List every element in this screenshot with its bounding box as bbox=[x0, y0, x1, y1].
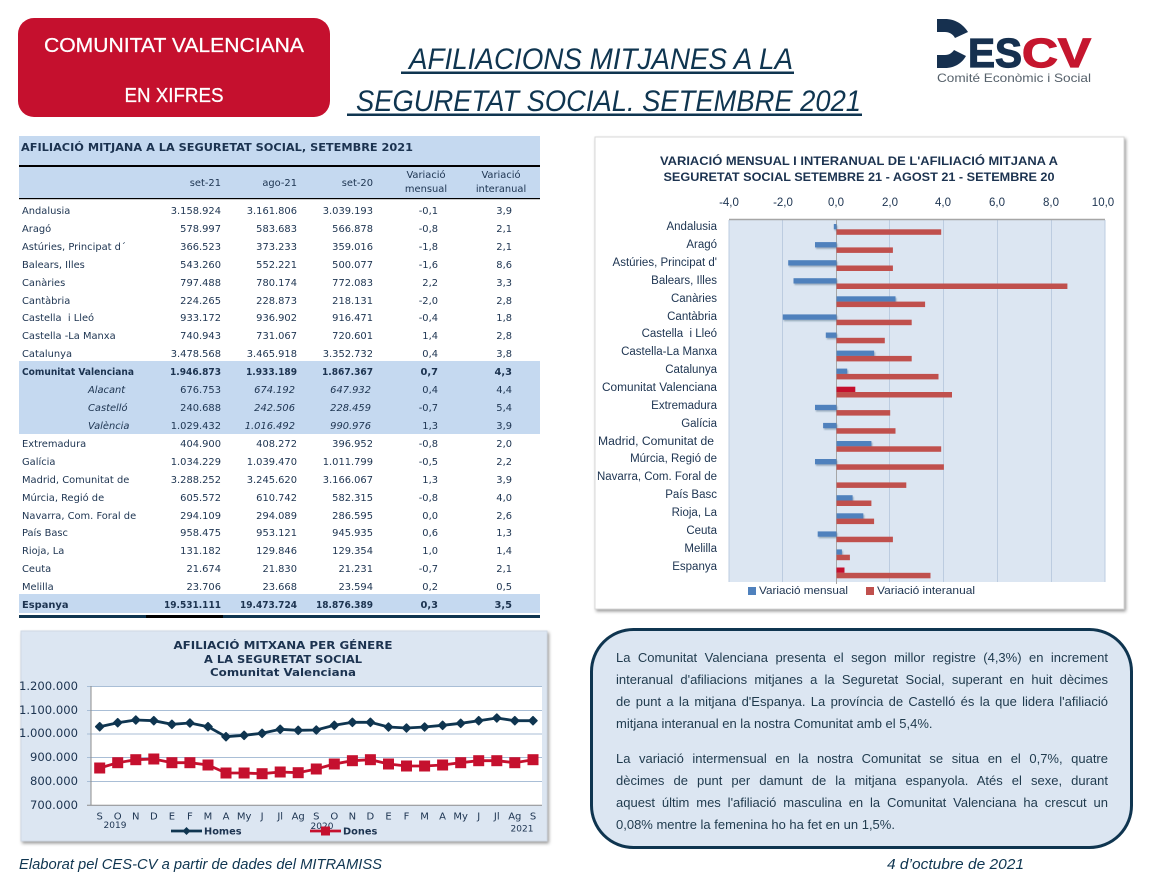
x axis labels: Jl bbox=[493, 812, 500, 822]
category labels: Cantàbria bbox=[667, 311, 718, 323]
row: Aragó: 583.683 bbox=[256, 224, 297, 235]
category labels: Espanya bbox=[672, 561, 718, 573]
plot background bbox=[91, 686, 542, 805]
row: Aragó: 578.997 bbox=[180, 224, 221, 235]
table header bbox=[19, 167, 540, 199]
row: Castella i Lleó bbox=[22, 312, 512, 324]
row: Castella i Lleó: 933.172 bbox=[180, 313, 221, 324]
row: País Basc bbox=[22, 527, 512, 539]
row: València: 990.976 bbox=[330, 421, 371, 432]
category labels: Galícia bbox=[681, 418, 718, 430]
x axis labels: Ag bbox=[292, 812, 305, 822]
row: Extremadura: -0,8 bbox=[419, 439, 438, 450]
grid lines and axis bbox=[729, 220, 1105, 584]
x axis labels: D bbox=[150, 812, 158, 822]
row: Rioja: 129.354 bbox=[332, 546, 373, 557]
row: Madrid: 3.288.252 bbox=[171, 475, 221, 486]
row: Comunitat Valenciana bbox=[22, 367, 512, 378]
row: Catalunya: Catalunya bbox=[22, 349, 72, 360]
row: Andalusia: 3.161.806 bbox=[247, 206, 297, 217]
row: Navarra: 294.109 bbox=[180, 511, 221, 522]
panel: text box background bbox=[592, 630, 1132, 848]
category labels: Aragó bbox=[686, 239, 717, 251]
row: Canàries: 797.488 bbox=[180, 278, 221, 289]
x axis labels bbox=[97, 812, 536, 834]
row: Madrid: 3.166.067 bbox=[323, 475, 373, 486]
x axis labels: A bbox=[223, 812, 230, 822]
x axis labels: Jl bbox=[276, 812, 283, 822]
table title band: AFILIACIÓ MITJANA A LA SEGURETAT SOCIAL, SETEMBRE 2021 bbox=[21, 141, 413, 154]
row: Rioja: 131.182 bbox=[180, 546, 221, 557]
x axis labels: N bbox=[132, 812, 140, 822]
text block: paragraph 2: 0,08% mentre la femenina ho ha fet en un 1,5%. bbox=[616, 817, 895, 832]
category labels: Melilla bbox=[684, 543, 718, 555]
row: Ceuta: Ceuta bbox=[22, 564, 51, 575]
row: Extremadura: Extremadura bbox=[22, 439, 86, 450]
row: Cantàbria: 2,8 bbox=[496, 296, 512, 307]
text block: paragraph 1 bbox=[616, 650, 1108, 731]
bars: variació mensual bbox=[783, 224, 896, 555]
row: Castelló: 242.506 bbox=[254, 403, 295, 414]
table header: interanual bbox=[476, 184, 526, 195]
row: Cantàbria: 218.131 bbox=[332, 296, 373, 307]
row: Navarra: 0,0 bbox=[422, 511, 438, 522]
category labels: Madrid, Comunitat de bbox=[598, 436, 714, 448]
row: Comunitat Valenciana: 1.946.873 bbox=[170, 367, 221, 378]
row: Balears: Balears, Illes bbox=[22, 260, 85, 271]
row: Rioja: Rioja, La bbox=[22, 546, 64, 557]
x axis labels: 2019 bbox=[104, 821, 127, 831]
row: Aragó: Aragó bbox=[22, 223, 51, 235]
row: Cantàbria: Cantàbria bbox=[22, 295, 70, 307]
row: Múrcia: 610.742 bbox=[256, 493, 297, 504]
row: València: 1.016.492 bbox=[245, 421, 295, 432]
row: Cantàbria: -2,0 bbox=[419, 296, 438, 307]
row: Castella i Lleó: 916.471 bbox=[332, 313, 373, 324]
row: Cantàbria: 228.873 bbox=[256, 296, 297, 307]
row: Castella i Lleó: Castella i Lleó bbox=[22, 312, 94, 324]
row: Comunitat Valenciana: 1.933.189 bbox=[246, 367, 297, 378]
x axis labels: O bbox=[114, 812, 122, 822]
row: Navarra: 2,6 bbox=[496, 511, 512, 522]
row: Catalunya: 3,8 bbox=[496, 349, 512, 360]
text block: paragraph 1: de punt a la mitjana d'Espanya. La província de Castelló és la que lidera l'afiliació bbox=[616, 694, 1108, 709]
row: Ceuta: 21.830 bbox=[262, 564, 297, 575]
category labels: Catalunya bbox=[665, 364, 718, 376]
y axis labels: 1.200.000 bbox=[19, 679, 78, 693]
row: Melilla: 23.706 bbox=[186, 582, 221, 593]
row: Comunitat Valenciana: 1.867.367 bbox=[322, 367, 373, 378]
x axis labels: F bbox=[404, 812, 410, 822]
row: Melilla: 0,5 bbox=[496, 582, 512, 593]
row: Balears: 552.221 bbox=[256, 260, 297, 271]
row: Espanya bbox=[22, 600, 512, 611]
row: País Basc: 953.121 bbox=[256, 528, 297, 539]
category labels: Extremadura bbox=[651, 400, 718, 412]
row: Madrid bbox=[22, 475, 512, 486]
row: País Basc: 945.935 bbox=[332, 528, 373, 539]
table title band bbox=[19, 136, 540, 167]
x axis labels: J bbox=[260, 812, 264, 822]
row: Ceuta: -0,7 bbox=[419, 564, 438, 575]
x axis labels: My bbox=[453, 812, 468, 822]
text block: paragraph 1: La Comunitat Valenciana presenta el segon millor registre (4,3%) en increment bbox=[616, 650, 1108, 665]
row: Navarra bbox=[22, 511, 512, 522]
row: Alacant: 674.192 bbox=[254, 385, 295, 396]
x axis labels: E bbox=[385, 812, 392, 822]
badge: Comunitat Valenciana en xifres bbox=[18, 18, 330, 117]
category labels: Navarra, Com. Foral de bbox=[597, 471, 717, 483]
row: Espanya: 18.876.389 bbox=[316, 600, 373, 611]
row: Espanya: 19.473.724 bbox=[240, 600, 297, 611]
title: SEGURETAT SOCIAL. SETEMBRE 2021 bbox=[356, 85, 861, 118]
row: Canàries: 780.174 bbox=[256, 278, 297, 289]
row: Múrcia: 605.572 bbox=[180, 493, 221, 504]
row: Balears: 543.260 bbox=[180, 260, 221, 271]
table header: ago-21 bbox=[262, 178, 297, 189]
row: Castella-La Manxa: 2,8 bbox=[496, 331, 512, 342]
row: Rioja: 1,4 bbox=[496, 546, 512, 557]
badge: Comunitat Valenciana en xifres: EN XIFRES bbox=[124, 85, 224, 107]
plot area bbox=[729, 220, 1105, 582]
line chart title: AFILIACIÓ MITXANA PER GÉNERE bbox=[174, 639, 392, 652]
row: Aragó: 566.878 bbox=[332, 224, 373, 235]
row: Rioja bbox=[22, 546, 512, 557]
category labels: Castella i Lleó bbox=[642, 328, 717, 340]
row: Melilla: 0,2 bbox=[422, 582, 438, 593]
row: Catalunya: 0,4 bbox=[422, 349, 438, 360]
row: Extremadura: 408.272 bbox=[256, 439, 297, 450]
title bbox=[347, 43, 862, 118]
row: Espanya: 0,3 bbox=[420, 600, 438, 611]
y axis labels: 700.000 bbox=[30, 798, 78, 812]
row: Navarra: Navarra, Com. Foral de bbox=[22, 511, 136, 522]
category labels: Comunitat Valenciana bbox=[602, 382, 718, 394]
y axis labels: 1.000.000 bbox=[19, 726, 78, 740]
row: Múrcia: 582.315 bbox=[332, 493, 373, 504]
chart legend: Variació mensual bbox=[759, 585, 848, 597]
row: Melilla bbox=[22, 582, 512, 593]
row: Catalunya bbox=[22, 349, 512, 360]
row: València: 3,9 bbox=[496, 421, 512, 432]
row: Castelló: Castelló bbox=[88, 402, 128, 414]
logo: CES-CV: Comité Econòmic i Social bbox=[937, 71, 1091, 85]
panel: line chart afiliació per gènere bbox=[19, 631, 547, 841]
category labels: Balears, Illes bbox=[651, 275, 717, 287]
category labels: Andalusia bbox=[666, 221, 718, 233]
row: Catalunya: 3.478.568 bbox=[171, 349, 221, 360]
y axis labels: 1.100.000 bbox=[19, 703, 78, 717]
row: Canàries: Canàries bbox=[22, 277, 65, 289]
highlight band: Espanya bbox=[19, 594, 540, 613]
line chart title: A LA SEGURETAT SOCIAL bbox=[204, 654, 362, 666]
row: Galícia: -0,5 bbox=[419, 457, 438, 468]
x axis labels: O bbox=[330, 812, 338, 822]
logo: CES-CV: CV bbox=[1022, 30, 1092, 76]
bars: highlighted mensual, Comunitat Valenciana and Espanya bbox=[836, 387, 855, 573]
x axis labels: 2,0 bbox=[882, 197, 898, 209]
row: Extremadura: 396.952 bbox=[332, 439, 373, 450]
x axis labels: 4,0 bbox=[935, 197, 951, 209]
row: Navarra: 294.089 bbox=[256, 511, 297, 522]
row: Castella-La Manxa: 720.601 bbox=[332, 331, 373, 342]
table header: set-20 bbox=[342, 178, 373, 189]
line chart legend: Dones bbox=[343, 826, 377, 838]
row: Astúries: 359.016 bbox=[332, 242, 373, 253]
table header: Variació bbox=[406, 169, 446, 181]
row: Balears: 8,6 bbox=[496, 260, 512, 271]
logo: CES-CV bbox=[937, 19, 1092, 85]
row: Castelló: 5,4 bbox=[496, 403, 512, 414]
row: País Basc: País Basc bbox=[22, 527, 68, 539]
row: País Basc: 958.475 bbox=[180, 528, 221, 539]
chart title bbox=[660, 153, 1058, 184]
chart title: VARIACIÓ MENSUAL I INTERANUAL DE L'AFILIACIÓ MITJANA A bbox=[660, 153, 1058, 168]
category labels: Múrcia, Regió de bbox=[630, 453, 717, 465]
x axis labels: F bbox=[187, 812, 193, 822]
row: Andalusia: 3.158.924 bbox=[171, 206, 221, 217]
x axis labels: My bbox=[237, 812, 251, 822]
row: Madrid: 3.245.620 bbox=[247, 475, 297, 486]
x axis labels: 8,0 bbox=[1043, 197, 1059, 209]
row: Castella-La Manxa: 740.943 bbox=[180, 331, 221, 342]
row: Astúries: -1,8 bbox=[419, 242, 438, 253]
y axis labels: 800.000 bbox=[30, 774, 78, 788]
row: Balears bbox=[22, 260, 512, 271]
horizontal grid bbox=[87, 686, 542, 782]
category labels: Ceuta bbox=[686, 525, 718, 537]
chart legend bbox=[748, 585, 975, 597]
x axis labels bbox=[719, 197, 1114, 209]
row: Andalusia: Andalusia bbox=[22, 206, 70, 217]
x axis labels: D bbox=[367, 812, 375, 822]
row: València: València bbox=[88, 420, 129, 432]
x axis labels: S bbox=[530, 812, 536, 822]
row: Aragó bbox=[22, 223, 512, 235]
row: Astúries: 373.233 bbox=[256, 242, 297, 253]
row: Castella i Lleó: 936.902 bbox=[256, 313, 297, 324]
chart legend: Variació interanual bbox=[877, 585, 975, 597]
table header: Variació bbox=[481, 169, 521, 181]
chart title: SEGURETAT SOCIAL SETEMBRE 21 - AGOST 21 - SETEMBRE 20 bbox=[664, 170, 1055, 184]
row: Espanya: Espanya bbox=[22, 600, 68, 611]
row: Castelló: -0,7 bbox=[419, 403, 438, 414]
row: Galícia bbox=[22, 456, 512, 468]
row: Galícia: 1.011.799 bbox=[323, 457, 373, 468]
row: Navarra: 286.595 bbox=[332, 511, 373, 522]
row: Alacant: Alacant bbox=[87, 385, 126, 396]
row: Astúries: 366.523 bbox=[180, 242, 221, 253]
category labels: País Basc bbox=[665, 489, 717, 501]
x axis labels: S bbox=[313, 812, 319, 822]
x axis labels: 6,0 bbox=[989, 197, 1005, 209]
highlight band: Comunitat Valenciana bbox=[19, 361, 540, 434]
row: Alacant: 0,4 bbox=[422, 385, 438, 396]
row: Alacant: 676.753 bbox=[180, 385, 221, 396]
category labels bbox=[597, 221, 718, 573]
row: Castella-La Manxa: 1,4 bbox=[422, 331, 438, 342]
row: Astúries: Astúries, Principat d´ bbox=[22, 241, 126, 253]
row: Melilla: Melilla bbox=[22, 582, 54, 593]
text block: paragraph 2: aquest últim mes l'afiliació masculina en la Comunitat Valenciana ha crescut un bbox=[616, 795, 1108, 810]
date: 4 d’octubre de 2021 bbox=[887, 857, 1024, 873]
badge: Comunitat Valenciana en xifres: COMUNITAT VALENCIANA bbox=[44, 35, 305, 57]
row: Múrcia: 4,0 bbox=[496, 493, 512, 504]
row: Canàries: 2,2 bbox=[422, 278, 438, 289]
text block: paragraph 2: dècimes de punt per damunt de la mitjana espanyola. Atés el sexe, durant bbox=[616, 773, 1108, 788]
x axis labels: 2020 bbox=[311, 822, 334, 832]
table header: mensual bbox=[405, 184, 447, 195]
row: Espanya: 3,5 bbox=[494, 600, 512, 611]
x axis labels: -4,0 bbox=[719, 197, 739, 209]
row: Múrcia: Múrcia, Regió de bbox=[22, 492, 104, 504]
line: Homes bbox=[96, 714, 537, 741]
row: Balears: -1,6 bbox=[419, 260, 438, 271]
text block: paragraph 2 bbox=[616, 751, 1108, 832]
row: Extremadura: 404.900 bbox=[180, 439, 221, 450]
x axis labels: 10,0 bbox=[1092, 197, 1114, 209]
row: Múrcia: -0,8 bbox=[419, 493, 438, 504]
row: Ceuta bbox=[22, 564, 512, 575]
row: Castelló bbox=[88, 402, 512, 414]
line chart title bbox=[174, 639, 392, 679]
row: Galícia: Galícia bbox=[22, 456, 55, 468]
row: València: 1.029.432 bbox=[171, 421, 221, 432]
row: Andalusia: 3,9 bbox=[496, 206, 512, 217]
row: Castelló: 240.688 bbox=[180, 403, 221, 414]
row: Astúries: 2,1 bbox=[496, 242, 512, 253]
row: Alacant: 4,4 bbox=[496, 385, 512, 396]
row: Andalusia bbox=[22, 206, 512, 217]
x axis labels: M bbox=[204, 812, 212, 822]
row: Castella i Lleó: -0,4 bbox=[419, 313, 438, 324]
row: Castella-La Manxa: 731.067 bbox=[256, 331, 297, 342]
x axis labels: Ag bbox=[508, 812, 521, 822]
row: Ceuta: 2,1 bbox=[496, 564, 512, 575]
row: Ceuta: 21.231 bbox=[338, 564, 373, 575]
row: València: 1,3 bbox=[422, 421, 438, 432]
row: València bbox=[88, 420, 512, 432]
row: Extremadura: 2,0 bbox=[496, 439, 512, 450]
text block: paragraph 2: La variació intermensual en la nostra Comunitat se situa en el 0,7%, quatre bbox=[616, 751, 1108, 766]
row: Cantàbria bbox=[22, 295, 512, 307]
row: Aragó: 2,1 bbox=[496, 224, 512, 235]
row: Comunitat Valenciana: 4,3 bbox=[494, 367, 512, 378]
row: Cantàbria: 224.265 bbox=[180, 296, 221, 307]
row: Galícia: 1.039.470 bbox=[247, 457, 297, 468]
row: Castella i Lleó: 1,8 bbox=[496, 313, 512, 324]
row: Galícia: 2,2 bbox=[496, 457, 512, 468]
table header: set-21 bbox=[190, 178, 221, 189]
row: Comunitat Valenciana: 0,7 bbox=[420, 367, 438, 378]
row: Melilla: 23.594 bbox=[338, 582, 373, 593]
x axis labels: -2,0 bbox=[773, 197, 793, 209]
line chart legend bbox=[171, 826, 377, 838]
x axis labels: S bbox=[97, 812, 103, 822]
row: Castella-La Manxa: Castella -La Manxa bbox=[22, 331, 116, 342]
row: Catalunya: 3.352.732 bbox=[323, 349, 373, 360]
x axis labels: N bbox=[349, 812, 356, 822]
text block: paragraph 1: interanual d'afiliacions mitjanes a la Seguretat Social, superant en huit dècimes bbox=[616, 672, 1108, 687]
y axis labels bbox=[19, 679, 78, 812]
row: País Basc: 1,3 bbox=[496, 528, 512, 539]
x axis labels: 0,0 bbox=[828, 197, 844, 209]
row: Espanya: 19.531.111 bbox=[164, 600, 221, 611]
panel: bar chart variació mensual i interanual bbox=[595, 137, 1124, 609]
row: Catalunya: 3.465.918 bbox=[247, 349, 297, 360]
x axis labels: E bbox=[169, 812, 175, 822]
text block: paragraph 1: mitjana interanual en la nostra Comunitat amb el 5,4%. bbox=[616, 716, 933, 731]
row: Balears: 500.077 bbox=[332, 260, 373, 271]
table bottom rule bbox=[19, 615, 540, 618]
x axis labels: A bbox=[439, 812, 446, 822]
row: Canàries: 3,3 bbox=[496, 278, 512, 289]
table: afiliació mitjana bbox=[19, 136, 540, 618]
source note: Elaborat pel CES-CV a partir de dades del MITRAMISS bbox=[19, 857, 382, 873]
row: Rioja: 129.846 bbox=[256, 546, 297, 557]
row: Comunitat Valenciana: Comunitat Valenciana bbox=[22, 367, 134, 378]
row: Alacant: 647.932 bbox=[330, 385, 371, 396]
row: País Basc: 0,6 bbox=[422, 528, 438, 539]
line: Dones bbox=[94, 754, 538, 779]
row: Galícia: 1.034.229 bbox=[171, 457, 221, 468]
x axis labels: J bbox=[476, 812, 480, 822]
row: Extremadura bbox=[22, 439, 512, 450]
row: Madrid: 1,3 bbox=[422, 475, 438, 486]
line chart title: Comunitat Valenciana bbox=[210, 667, 356, 679]
category labels: Canàries bbox=[671, 293, 717, 305]
row: Madrid: Madrid, Comunitat de bbox=[22, 475, 129, 486]
axes bbox=[87, 686, 542, 805]
row: Andalusia: -0,1 bbox=[419, 206, 438, 217]
row: Ceuta: 21.674 bbox=[186, 564, 221, 575]
row: Canàries: 772.083 bbox=[332, 278, 373, 289]
row: Castelló: 228.459 bbox=[330, 403, 371, 414]
y axis labels: 900.000 bbox=[30, 750, 78, 764]
category labels: Castella-La Manxa bbox=[621, 346, 718, 358]
title: AFILIACIONS MITJANES A LA bbox=[407, 43, 793, 76]
row: Alacant bbox=[87, 385, 512, 396]
category labels: Rioja, La bbox=[672, 507, 718, 519]
row: Aragó: -0,8 bbox=[419, 224, 438, 235]
row: Madrid: 3,9 bbox=[496, 475, 512, 486]
x axis labels: 2021 bbox=[511, 824, 533, 834]
row: Múrcia bbox=[22, 492, 512, 504]
row: Canàries bbox=[22, 277, 512, 289]
category labels: Astúries, Principat d' bbox=[613, 257, 717, 269]
row: Castella-La Manxa bbox=[22, 331, 512, 342]
row: Rioja: 1,0 bbox=[422, 546, 438, 557]
line chart legend: Homes bbox=[204, 826, 242, 838]
row: Astúries bbox=[22, 241, 512, 253]
bars: variació interanual bbox=[836, 229, 1067, 578]
x axis labels: M bbox=[420, 812, 429, 822]
logo: CES-CV: ES bbox=[968, 30, 1022, 76]
row: Melilla: 23.668 bbox=[262, 582, 297, 593]
row: Andalusia: 3.039.193 bbox=[323, 206, 373, 217]
